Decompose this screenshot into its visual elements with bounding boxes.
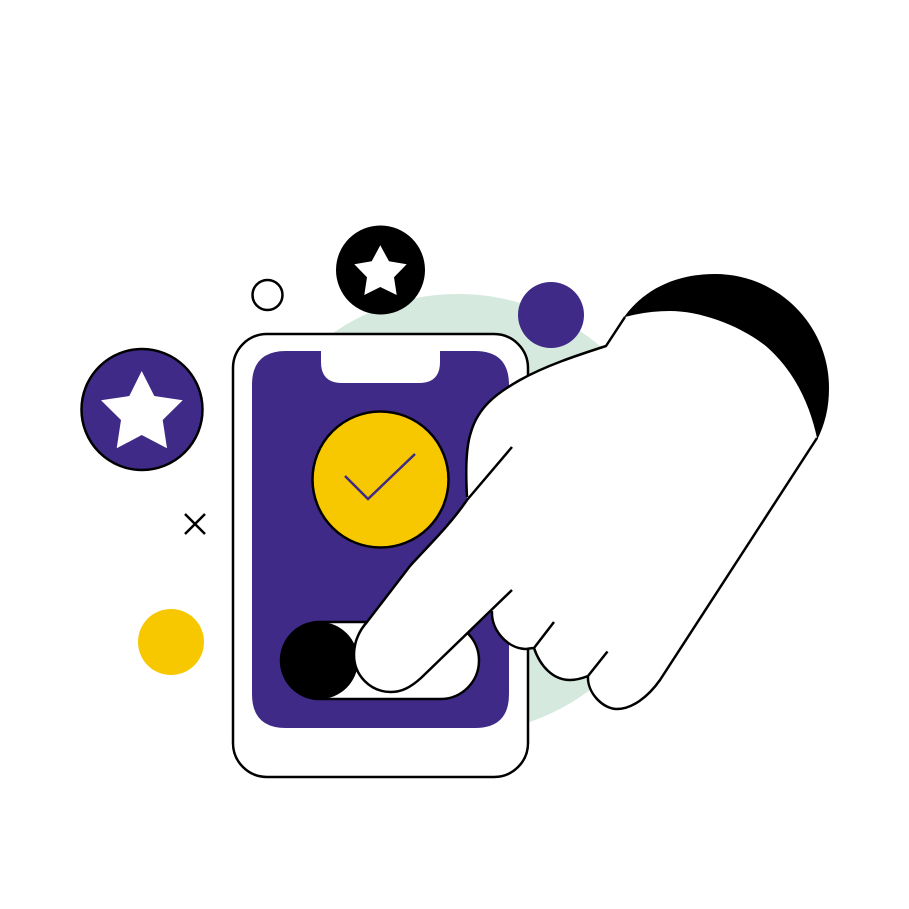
purple dot [518, 282, 584, 348]
phone screen [252, 351, 509, 728]
background green circle [238, 294, 678, 734]
purple star badge [82, 349, 202, 470]
phone body [233, 334, 528, 777]
black star badge [336, 226, 425, 314]
icon: white star [101, 371, 183, 448]
hand outline [354, 317, 817, 709]
cross mark [185, 514, 205, 534]
black cuff [622, 274, 829, 440]
icon: white star [354, 245, 407, 295]
yellow dot [138, 609, 204, 675]
yellow check badge [312, 412, 448, 548]
toggle switch [281, 622, 479, 699]
phone [233, 334, 528, 777]
icon: check mark [345, 454, 415, 499]
toggle knob [281, 622, 358, 699]
small outlined circle [252, 280, 282, 310]
hand shape [354, 311, 817, 709]
hand [354, 274, 829, 709]
toggle track [281, 622, 479, 699]
